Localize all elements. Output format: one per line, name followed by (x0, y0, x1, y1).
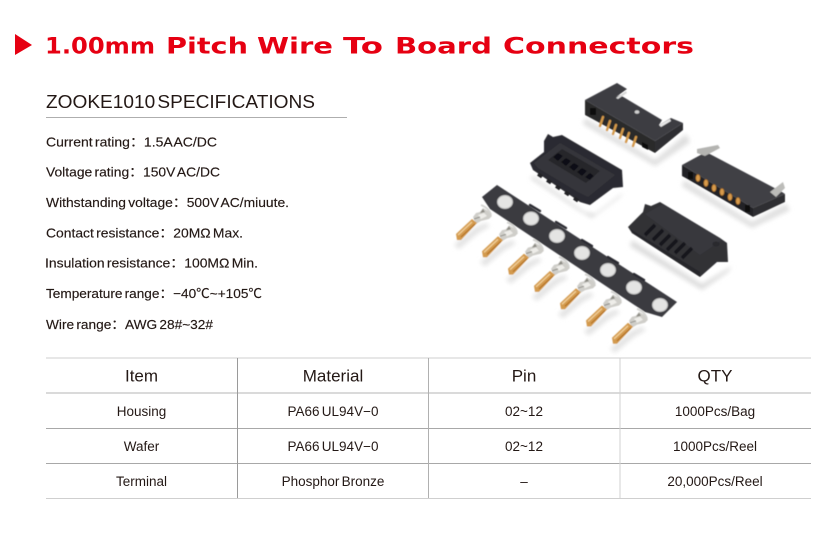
housing: bottom right (628, 202, 732, 290)
wafer: top (583, 83, 690, 166)
title: 1.00mm (45, 33, 155, 59)
table row: housing: PA66 UL94V−0 (288, 404, 378, 419)
table row: wafer: PA66 UL94V−0 (288, 439, 378, 454)
table row: terminal: Terminal (116, 474, 167, 489)
heading: specifications: ZOOKE1010 SPECIFICATIONS (46, 91, 315, 112)
table header row: Material (303, 366, 363, 386)
table grid (46, 358, 811, 498)
table header row: QTY (698, 366, 732, 386)
spec: voltage rating: Voltage rating：150V AC/DC (46, 165, 220, 180)
title: To (343, 33, 383, 59)
table row: housing: 1000Pcs/Bag (675, 404, 755, 419)
table row: terminal: 20,000Pcs/Reel (667, 474, 763, 489)
table row: terminal: – (520, 474, 528, 489)
table row: wafer: 02~12 (505, 439, 543, 454)
product photo: connectors (454, 83, 790, 353)
spec: wire range: Wire range：AWG 28#~32# (46, 317, 214, 332)
table row: terminal: Phosphor Bronze (282, 474, 384, 489)
spec: contact resistance: Contact resistance：20MΩ Max. (46, 226, 243, 241)
carrier band (482, 185, 677, 317)
title: Connectors (503, 33, 694, 59)
terminal strip (454, 185, 677, 353)
title: Wire (257, 33, 333, 59)
table header row (125, 366, 732, 386)
table row: housing: Housing (117, 404, 166, 419)
title: Pitch (166, 33, 248, 59)
table row: wafer (124, 439, 757, 454)
table header row: Pin (512, 366, 536, 386)
wafer: right (682, 145, 790, 228)
terminals (454, 205, 648, 353)
specification list (45, 135, 289, 332)
spec: current rating: Current rating：1.5A AC/DC (46, 135, 217, 150)
table row: housing (117, 404, 755, 419)
specification table (46, 358, 811, 498)
table header row: Item (125, 366, 158, 386)
table row: terminal (116, 474, 763, 489)
spec: temperature range: Temperature range：−40℃~+105℃ (46, 286, 262, 301)
spec: withstanding voltage: Withstanding voltage：500V AC/miuute. (46, 195, 289, 210)
icon: red triangle marker (15, 34, 32, 55)
title: Board (395, 33, 492, 59)
table row: wafer: Wafer (124, 439, 160, 454)
housing: left (530, 134, 624, 218)
table row: housing: 02~12 (505, 404, 543, 419)
spec: insulation resistance: Insulation resistance：100MΩ Min. (45, 256, 258, 271)
title (45, 33, 694, 59)
table row: wafer: 1000Pcs/Reel (673, 439, 757, 454)
